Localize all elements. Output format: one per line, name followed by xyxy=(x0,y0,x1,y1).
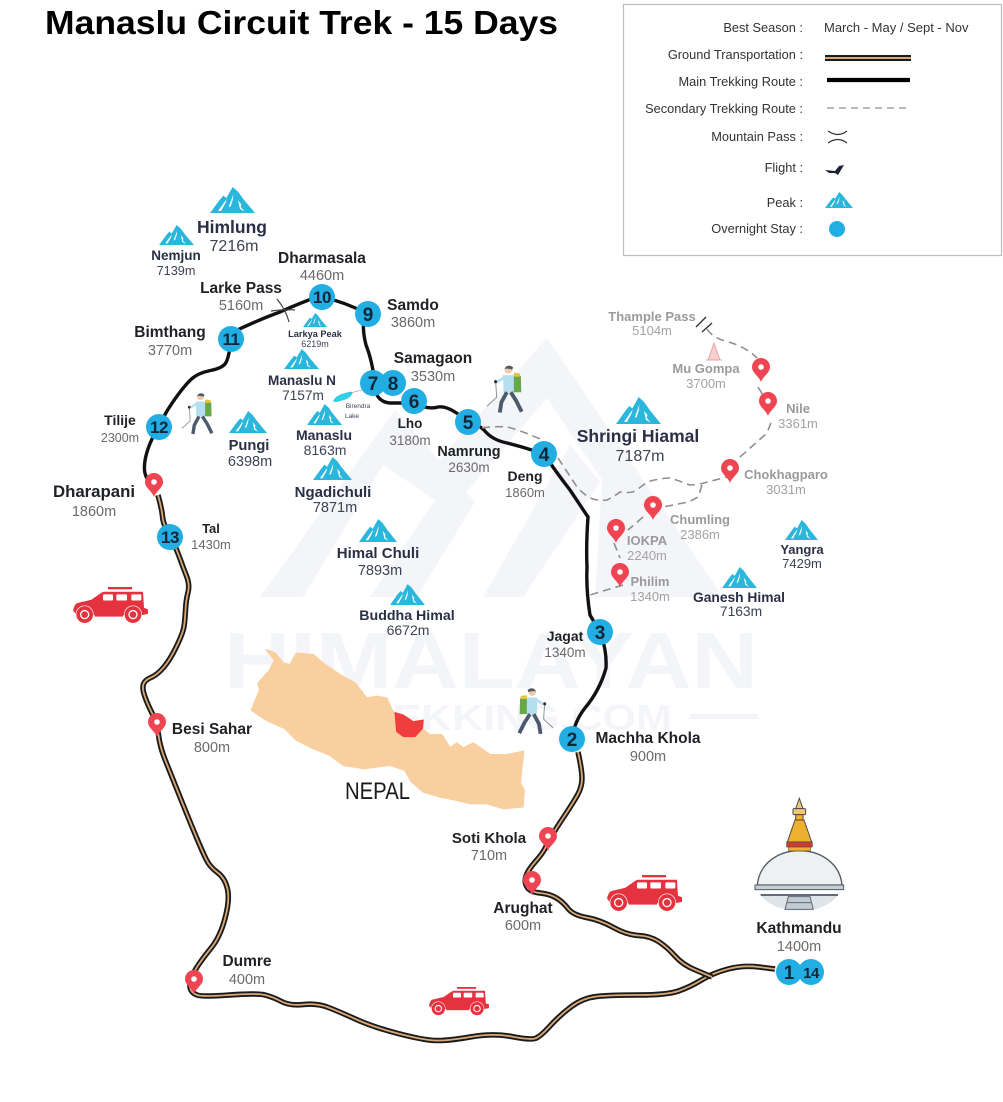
icon: pin Chokhagparo xyxy=(721,459,739,483)
label: Nepal: NEPAL xyxy=(345,778,410,805)
label: Dumre xyxy=(222,953,272,988)
icon: Mu Gompa xyxy=(706,343,722,360)
label: Kathmandu: Kathmandu xyxy=(756,920,842,937)
label: Himlung xyxy=(197,217,267,255)
label: Mu Gompa xyxy=(672,361,740,391)
label: Bimthang: Bimthang xyxy=(134,324,206,341)
icon: peak Ganesh Himal xyxy=(722,567,757,588)
stop 10 xyxy=(309,284,335,310)
label: Nemjun xyxy=(151,248,201,278)
label: Yangra: 7429m xyxy=(782,556,822,571)
label: Larkya Peak: Larkya Peak xyxy=(288,329,343,339)
label: Pungi xyxy=(228,438,272,470)
label: Dharapani: Dharapani xyxy=(53,482,135,501)
label: Nemjun: Nemjun xyxy=(151,248,201,263)
label: Larkya Peak xyxy=(288,329,343,349)
label: Tal: Tal xyxy=(202,521,220,536)
label: Manaslu N: 7157m xyxy=(282,388,324,403)
label: Yangra xyxy=(780,542,824,571)
title: Manaslu Circuit Trek - 15 Days xyxy=(45,5,558,42)
label: Arughat: 600m xyxy=(505,918,541,934)
icon: peak Nemjun xyxy=(159,225,194,245)
icon: car left xyxy=(73,587,148,623)
icon: pin Soti Khola xyxy=(539,827,557,851)
stop 9: 9 xyxy=(363,305,373,326)
icon: car right xyxy=(607,875,682,911)
icon: stupa xyxy=(755,798,844,911)
label: Chokhagparo: Chokhagparo xyxy=(744,467,828,482)
icon: peak Himlung xyxy=(210,187,255,213)
label: Namrung xyxy=(437,444,501,475)
overnight stops xyxy=(146,284,824,985)
label: Machha Khola xyxy=(595,730,701,765)
legend: ground transportation: Ground Transportation : xyxy=(668,47,803,62)
label: Manaslu: Manaslu xyxy=(296,427,352,443)
legend: flight xyxy=(765,160,844,175)
label: Samagaon: 3530m xyxy=(411,369,455,385)
label: Buddha Himal: Buddha Himal xyxy=(359,608,455,624)
icon: hiker lower xyxy=(519,688,553,734)
label: Namrung: Namrung xyxy=(437,444,501,460)
label: Tilije: Tilije xyxy=(104,412,136,428)
icon: peak Larkya xyxy=(303,313,327,327)
route: main trekking route xyxy=(144,295,606,739)
icon: Thample Pass xyxy=(696,317,712,332)
stop 1 xyxy=(776,959,802,985)
label: Kathmandu xyxy=(756,920,842,955)
label: Manaslu: 8163m xyxy=(304,442,346,458)
label: Dharmasala: Dharmasala xyxy=(278,250,366,267)
label: Jagat: 1340m xyxy=(544,645,586,660)
legend: secondary trekking route: Secondary Trekking Route : xyxy=(645,101,803,116)
stop 2: 2 xyxy=(567,730,577,751)
stop 5: 5 xyxy=(463,413,474,434)
label: Tal xyxy=(191,521,231,552)
label: Philim: Philim xyxy=(630,574,670,589)
label: Soti Khola xyxy=(452,830,527,864)
label: Philim: 1340m xyxy=(630,589,670,604)
label: Nemjun: 7139m xyxy=(157,264,195,278)
label: Soti Khola: Soti Khola xyxy=(452,830,527,847)
label: Chumling xyxy=(670,512,730,542)
label: Dharmasala xyxy=(278,250,366,284)
label: Manaslu N: Manaslu N xyxy=(268,373,336,388)
label: IOKPA: IOKPA xyxy=(627,533,668,548)
icon: peak Manaslu xyxy=(307,404,342,425)
watermark: HIMALAYAN xyxy=(224,616,758,705)
stop 13: 13 xyxy=(161,528,179,547)
label: Thample Pass: Thample Pass xyxy=(608,309,696,324)
icon: pin IOKPA xyxy=(607,519,625,543)
stop 12 xyxy=(146,414,172,440)
label: Bimthang xyxy=(134,324,206,359)
panel: legend xyxy=(624,4,1002,256)
label: Ngadichuli: 7871m xyxy=(313,500,357,516)
label: Himal Chuli: 7893m xyxy=(358,563,402,579)
legend: best season: March - May / Sept - Nov xyxy=(824,20,969,35)
label: Pungi: 6398m xyxy=(228,454,272,470)
legend: mountain pass: Mountain Pass : xyxy=(711,129,803,144)
label: Manaslu xyxy=(296,427,352,458)
legend: overnight stay: Overnight Stay : xyxy=(711,221,803,236)
stop 7: 7 xyxy=(368,374,378,395)
label: Buddha Himal xyxy=(359,608,455,638)
icon: pin Dharapani xyxy=(145,473,163,497)
label: Samdo: Samdo xyxy=(387,297,439,314)
label: Kathmandu: 1400m xyxy=(777,939,821,955)
icon: pin Nile xyxy=(759,392,777,416)
stop 2 xyxy=(559,726,585,752)
stop 1: 1 xyxy=(784,963,795,984)
label: Namrung: 2630m xyxy=(448,460,490,475)
stop 10: 10 xyxy=(313,288,331,307)
label: Nile: 3361m xyxy=(778,416,818,431)
label: Dumre: 400m xyxy=(229,972,265,988)
icon: pin Besi Sahar xyxy=(148,713,166,737)
route: ground transportation east xyxy=(525,752,712,977)
label: Ngadichuli xyxy=(295,484,371,516)
label: Dumre: Dumre xyxy=(222,953,272,970)
icon: peak Buddha Himal xyxy=(390,584,425,605)
legend: main trekking route: Main Trekking Route : xyxy=(679,74,803,89)
stop 8: 8 xyxy=(388,374,398,395)
label: Birendra Lake: Lake xyxy=(345,413,359,420)
label: Larke Pass: Larke Pass xyxy=(200,280,282,297)
label: Besi Sahar: Besi Sahar xyxy=(172,721,252,738)
label: Philim xyxy=(630,574,670,604)
legend: mountain pass xyxy=(711,129,847,144)
label: Jagat: Jagat xyxy=(547,628,584,644)
stop 11: 11 xyxy=(223,330,240,349)
label: Tilije: 2300m xyxy=(101,431,139,445)
label: Pungi: Pungi xyxy=(229,438,269,454)
icon: hiker left xyxy=(182,393,212,434)
stop 9 xyxy=(355,301,381,327)
label: Thample Pass xyxy=(608,309,696,338)
label: Arughat: Arughat xyxy=(493,900,553,917)
stop 4 xyxy=(531,441,557,467)
label: Lho xyxy=(389,416,431,448)
icon: pin Chumling xyxy=(644,496,662,520)
legend: peak: Peak : xyxy=(767,195,803,210)
label: Chumling: Chumling xyxy=(670,512,730,527)
label: Manaslu N xyxy=(268,373,336,403)
icon: peak Himal Chuli xyxy=(359,519,397,542)
label: Ngadichuli: Ngadichuli xyxy=(295,484,371,501)
label: Besi Sahar xyxy=(172,721,252,756)
label: Himal Chuli xyxy=(337,545,419,579)
label: Ganesh Himal: Ganesh Himal xyxy=(693,590,785,605)
label: Nile: Nile xyxy=(786,401,810,416)
label: Shringi Hiamal xyxy=(577,426,699,465)
legend: best season: Best Season : xyxy=(723,20,803,35)
route: ground transportation west xyxy=(143,495,775,1041)
legend: best season xyxy=(723,20,969,35)
label: Dharapani xyxy=(53,482,135,520)
label: IOKPA xyxy=(627,533,668,563)
label: Larke Pass: 5160m xyxy=(219,298,263,314)
label: Larkya Peak: 6219m xyxy=(301,339,329,349)
stop 6: 6 xyxy=(409,392,419,413)
label: Buddha Himal: 6672m xyxy=(387,622,429,638)
stop 3: 3 xyxy=(595,623,605,644)
stop 3 xyxy=(587,619,613,645)
stop 13 xyxy=(157,524,183,550)
icon: peak Yangra xyxy=(785,520,818,540)
label: Nile xyxy=(778,401,818,431)
icon: pin Mu Gompa xyxy=(752,358,770,382)
label: Samagaon: Samagaon xyxy=(394,350,472,367)
label: Himal Chuli: Himal Chuli xyxy=(337,545,419,562)
label: Chumling: 2386m xyxy=(680,527,720,542)
label: Samdo: 3860m xyxy=(391,315,435,331)
legend: flight: Flight : xyxy=(765,160,803,175)
watermark xyxy=(224,338,758,738)
legend: overnight stay xyxy=(711,221,845,237)
label: Arughat xyxy=(493,900,553,934)
label: Tilije xyxy=(101,412,139,445)
label: Larke Pass xyxy=(200,280,282,314)
label: Deng: 1860m xyxy=(505,485,545,500)
stop 7 xyxy=(360,370,386,396)
route: secondary trekking route xyxy=(482,329,772,595)
icon: pin Arughat xyxy=(523,871,541,895)
label: Mu Gompa: Mu Gompa xyxy=(672,361,740,376)
label: Besi Sahar: 800m xyxy=(194,740,230,756)
label: Himlung: Himlung xyxy=(197,217,267,237)
label: Samdo xyxy=(387,297,439,331)
label: Deng xyxy=(505,468,545,500)
label: Mu Gompa: 3700m xyxy=(686,376,726,391)
label: Shringi Hiamal: 7187m xyxy=(616,448,664,465)
icon: peak Manaslu N xyxy=(284,349,319,369)
stop 12: 12 xyxy=(150,418,168,437)
stop 4: 4 xyxy=(539,445,550,466)
label: Deng: Deng xyxy=(508,468,542,484)
icon: Larke Pass xyxy=(271,299,295,322)
icon: pin Philim xyxy=(611,563,629,587)
label: Birendra Lake: Birendra xyxy=(346,403,371,410)
label: Machha Khola: 900m xyxy=(630,749,666,765)
label: Tal: 1430m xyxy=(191,537,231,552)
label: Soti Khola: 710m xyxy=(471,848,507,864)
label: Thample Pass: 5104m xyxy=(632,323,672,338)
label: Birendra Lake xyxy=(345,403,371,420)
label: Lho: Lho xyxy=(398,416,422,431)
icon: hiker center xyxy=(487,366,522,413)
stop 11 xyxy=(218,326,244,352)
label: Himlung: 7216m xyxy=(210,238,258,255)
label: IOKPA: 2240m xyxy=(627,548,667,563)
legend: peak xyxy=(767,192,853,210)
icon: car bottom xyxy=(429,987,489,1015)
map: Manaslu region highlight xyxy=(395,713,423,737)
map: Nepal xyxy=(252,650,524,808)
watermark: TREKKING.COM xyxy=(335,697,672,738)
stop 14: 14 xyxy=(803,965,820,982)
label: Dharmasala: 4460m xyxy=(300,268,344,284)
icon: Birendra Lake xyxy=(333,390,362,402)
label: Machha Khola: Machha Khola xyxy=(595,730,701,747)
icon: peak Shringi Hiamal xyxy=(616,397,661,424)
stop 6 xyxy=(401,388,427,414)
label: Ganesh Himal xyxy=(693,590,785,619)
label: Bimthang: 3770m xyxy=(148,343,192,359)
label: Dharapani: 1860m xyxy=(72,504,116,520)
stop 5 xyxy=(455,409,481,435)
label: Samagaon xyxy=(394,350,472,385)
stop 14 xyxy=(798,959,824,985)
icon: pin Dumre xyxy=(185,970,203,994)
stop 8 xyxy=(380,370,406,396)
label: Jagat xyxy=(544,628,586,660)
label: Yangra: Yangra xyxy=(780,542,824,557)
icon: peak Ngadichuli xyxy=(313,457,352,480)
label: Lho: 3180m xyxy=(389,433,431,448)
icon: peak Pungi xyxy=(229,411,267,433)
label: Ganesh Himal: 7163m xyxy=(720,604,762,619)
label: Chokhagparo: 3031m xyxy=(766,482,806,497)
label: Shringi Hiamal: Shringi Hiamal xyxy=(577,426,699,446)
label: Chokhagparo xyxy=(744,467,828,497)
